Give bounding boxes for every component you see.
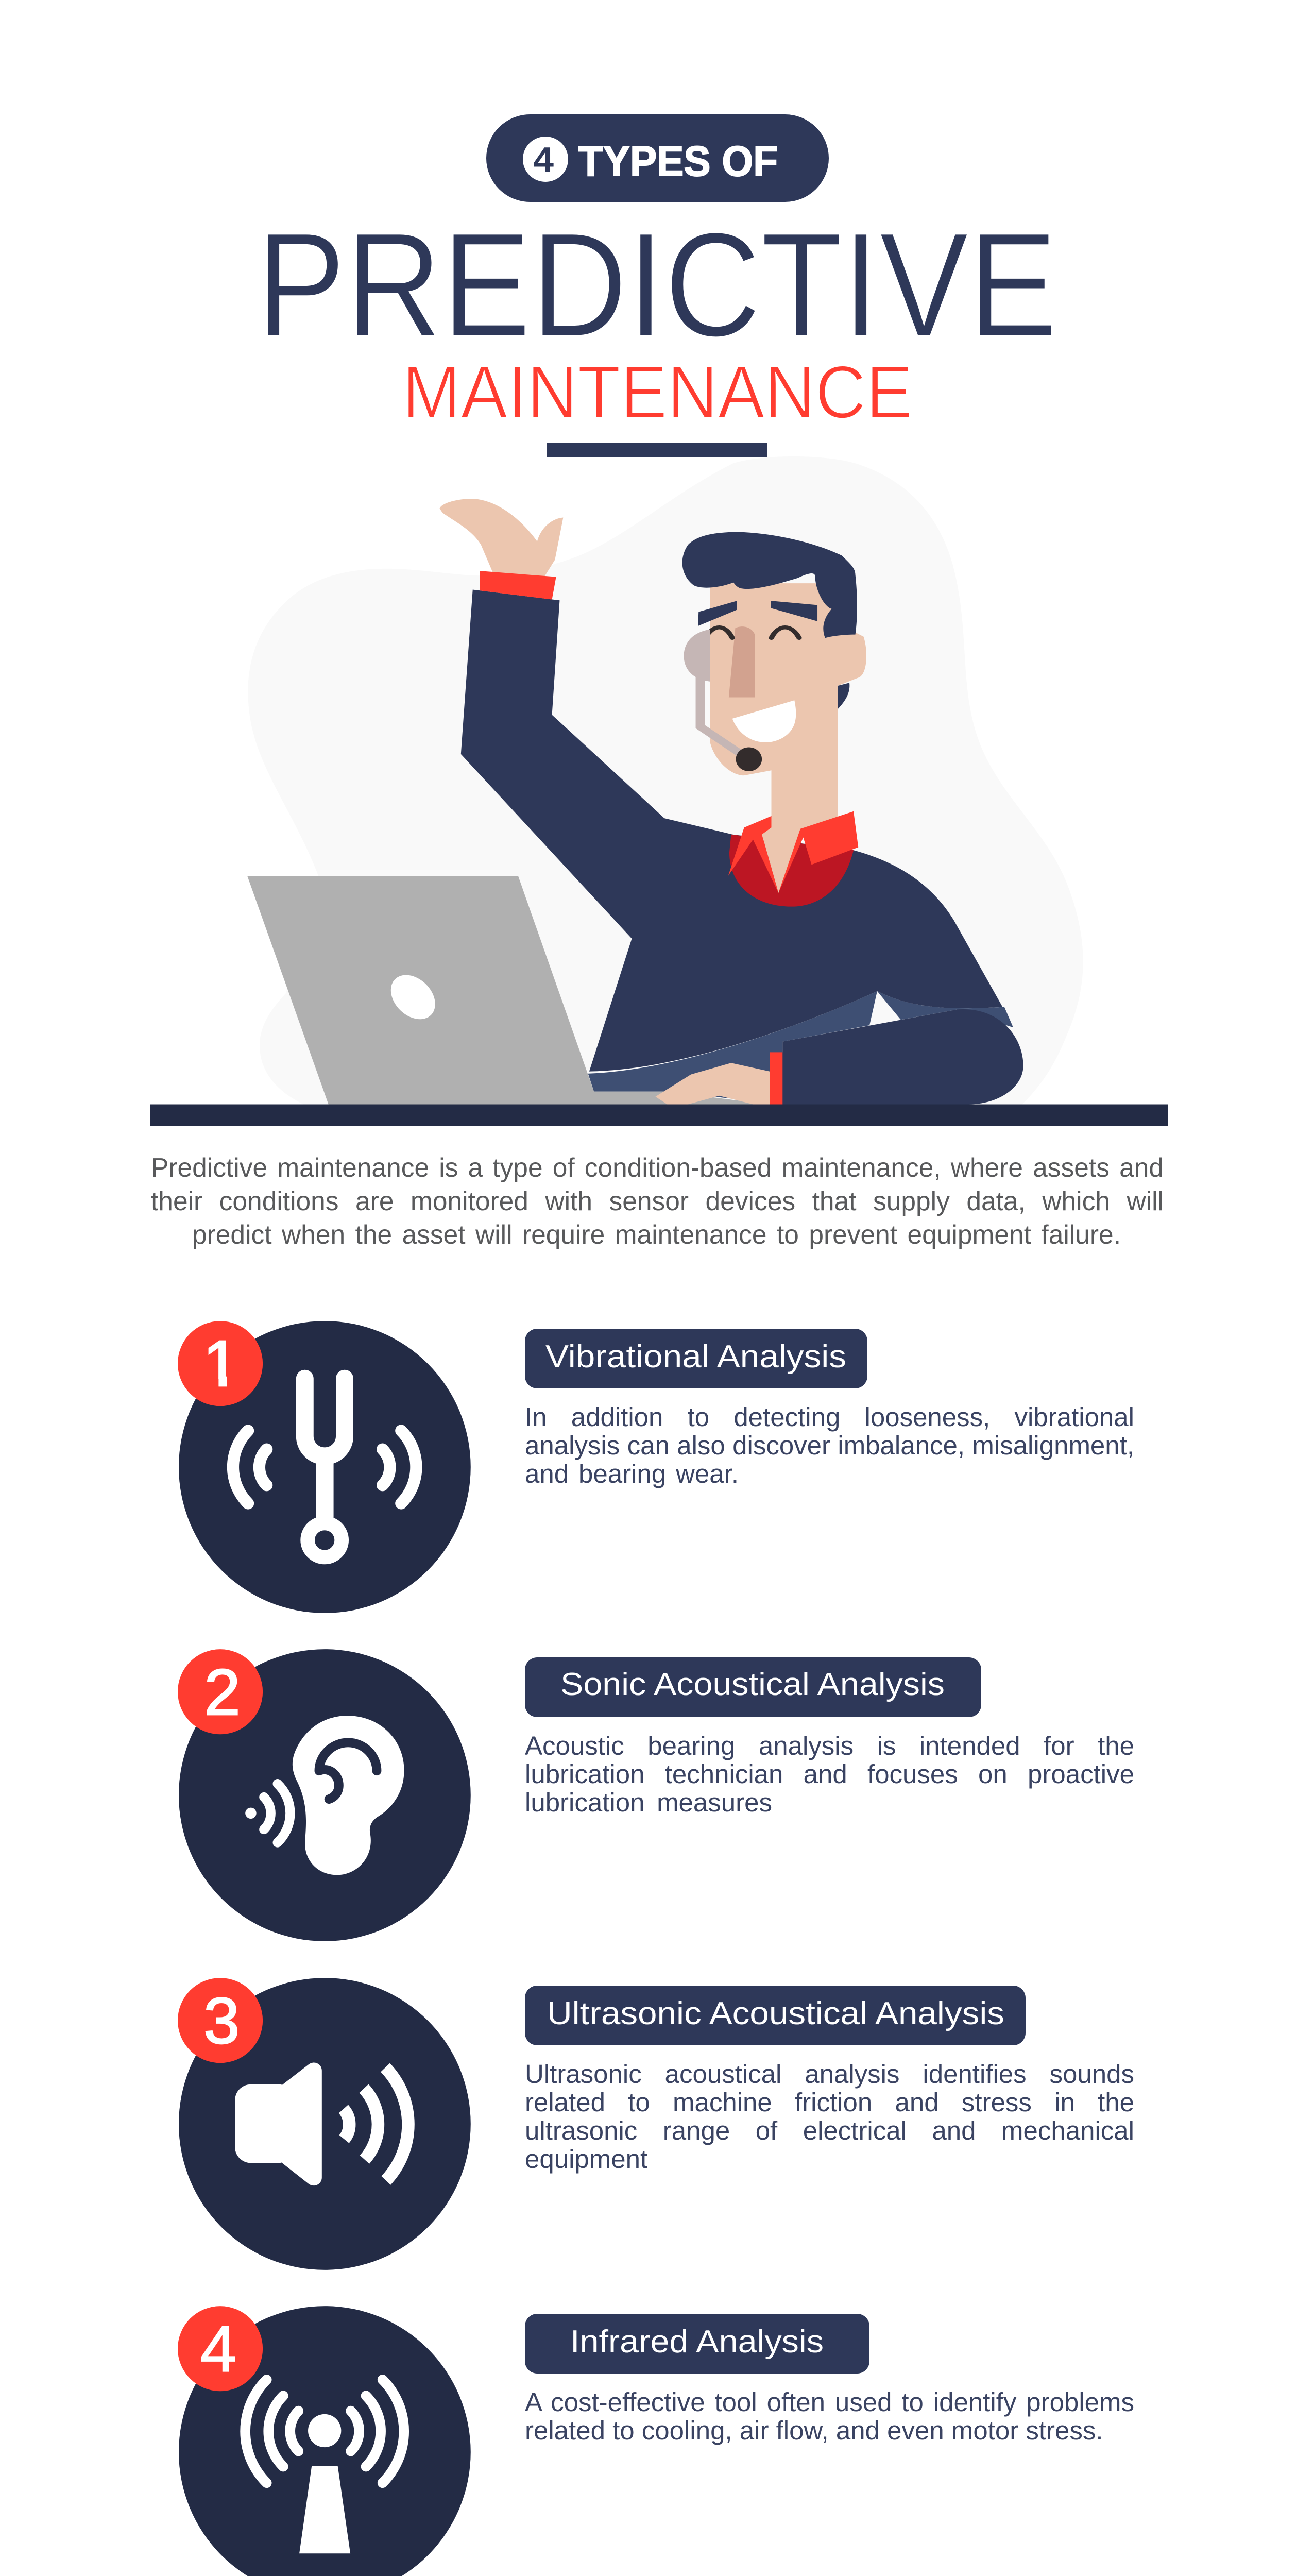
heading: sonic acoustical analysis: Sonic Acoustical Analysis (560, 1667, 945, 1702)
description: lubrication measures (525, 1788, 772, 1817)
hair (682, 532, 857, 638)
raised cuff (480, 571, 556, 600)
intro paragraph (151, 1153, 1164, 1249)
description: analysis can also discover imbalance, misalignment, (525, 1431, 1134, 1460)
icon: tuning fork: 1 (203, 1327, 239, 1400)
icon: ear: 2 (204, 1656, 241, 1728)
lower cuff (770, 1052, 784, 1105)
title block (257, 114, 1057, 457)
title pill: 4 types of: TYPES OF (578, 137, 778, 185)
heading: ultrasonic acoustical analysis (525, 1986, 1026, 2045)
laptop (247, 876, 768, 1105)
icon: tuning fork (178, 1321, 471, 1613)
panel: sonic acoustical analysis (178, 1649, 1134, 1941)
heading: ultrasonic acoustical analysis: Ultrasonic Acoustical Analysis (547, 1996, 1004, 2031)
heading: sonic acoustical analysis (525, 1657, 981, 1717)
intro paragraph: their conditions are monitored with sensor devices that supply data, which will (151, 1186, 1164, 1216)
forearm (782, 1009, 1023, 1105)
face and neck (710, 583, 866, 893)
description: lubrication technician and focuses on proactive (525, 1759, 1134, 1789)
panel: ultrasonic acoustical analysis (178, 1978, 1134, 2270)
icon: antenna (178, 2306, 471, 2576)
collar (728, 811, 858, 893)
title pill: 4 types of (486, 114, 829, 202)
heading: infrared analysis (525, 2314, 869, 2374)
icon: speaker (178, 1978, 471, 2270)
intro paragraph: Predictive maintenance is a type of condition-based maintenance, where assets and (151, 1153, 1164, 1182)
heading: infrared analysis: Infrared Analysis (570, 2324, 824, 2360)
background blob (248, 456, 1083, 1104)
intro paragraph: predict when the asset will require maintenance to prevent equipment failure. (192, 1219, 1121, 1249)
mouth (732, 700, 796, 742)
title pill: 4 types of: 4 (533, 140, 554, 179)
description (525, 2387, 1134, 2445)
title: maintenance: MAINTENANCE (402, 350, 913, 434)
description: ultrasonic range of electrical and mechanical (525, 2116, 1134, 2145)
raised hand (439, 499, 563, 577)
heading: vibrational analysis: Vibrational Analysis (545, 1339, 846, 1375)
undershirt (729, 835, 854, 907)
back hair (838, 683, 849, 709)
headset (684, 630, 762, 771)
lower hand (655, 1063, 770, 1105)
nose (729, 626, 755, 697)
description (525, 1402, 1134, 1488)
description: In addition to detecting looseness, vibrational (525, 1402, 1134, 1432)
heading: vibrational analysis (525, 1329, 867, 1388)
description: A cost-effective tool often used to identify problems (525, 2387, 1134, 2417)
description: Acoustic bearing analysis is intended for the (525, 1731, 1134, 1760)
eyebrows (698, 601, 817, 626)
illustration: man with headset at laptop (150, 499, 1168, 1126)
icon: antenna: 4 (200, 2312, 236, 2385)
desk (150, 1105, 1168, 1126)
description: Ultrasonic acoustical analysis identifies sounds (525, 2059, 1134, 2089)
description (525, 2059, 1134, 2174)
panel: vibrational analysis (178, 1321, 1134, 1613)
description: equipment (525, 2144, 647, 2174)
icon: speaker: 3 (203, 1985, 240, 2057)
shirt lower lighter panel (588, 991, 1013, 1105)
icon: ear (178, 1649, 471, 1941)
description (525, 1731, 1134, 1817)
panel: infrared analysis (178, 2306, 1134, 2576)
title underline bar (547, 443, 767, 457)
description: related to cooling, air flow, and even motor stress. (525, 2416, 1103, 2445)
description: related to machine friction and stress in the (525, 2088, 1134, 2117)
eyes (705, 628, 799, 638)
sweater torso and raised arm (461, 590, 1002, 1072)
description: and bearing wear. (525, 1459, 739, 1488)
